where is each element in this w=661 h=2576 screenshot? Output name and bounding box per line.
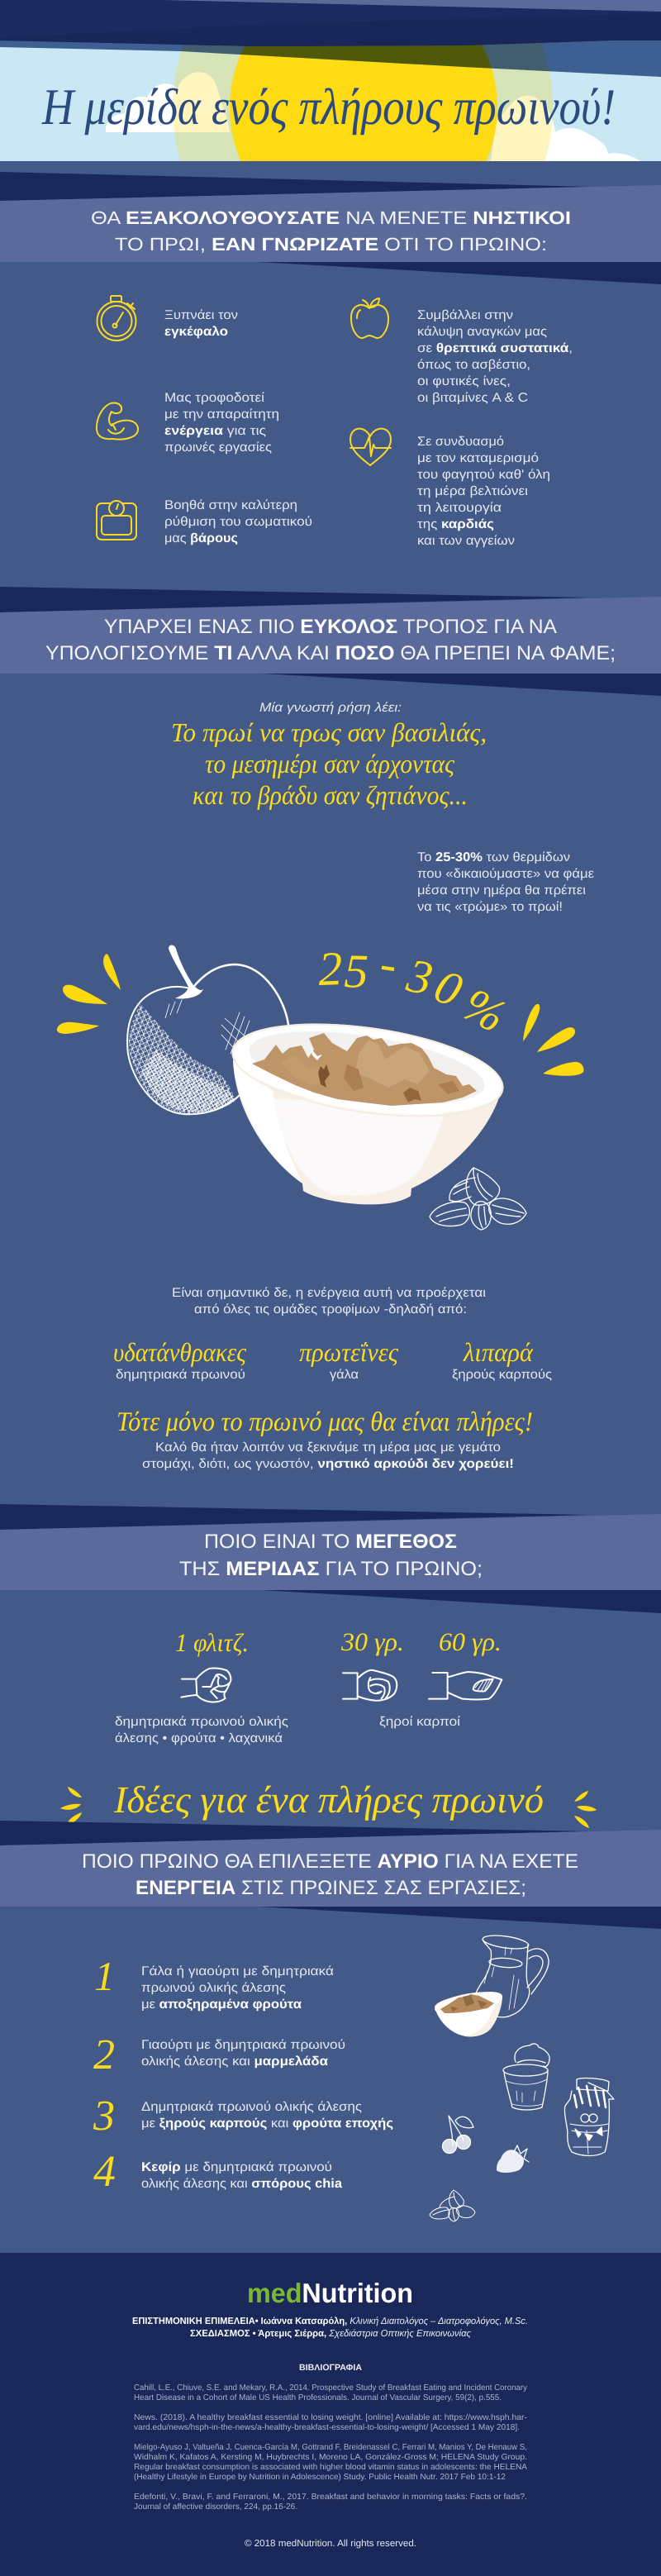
panel: portion size heading: ΤΗΣ ΜΕΡΙΔΑΣ ΓΙΑ ΤΟ ΠΡΩΙΝΟ;	[179, 1558, 483, 1580]
heading: breakfast ideas: Ιδέες για ένα πλήρες πρωινό	[113, 1778, 544, 1821]
sparks: right of bowl	[523, 1004, 584, 1076]
icon: weight scale	[97, 501, 136, 540]
text: closing remark	[142, 1440, 514, 1471]
credits: ΕΠΙΣΤΗΜΟΝΙΚΗ ΕΠΙΜΕΛΕΙΑ• Ιωάννα Κατσαρόλη, Κλινική Διαιτολόγος – Διατροφολόγος, M.Sc.	[132, 2316, 528, 2326]
quote: Το πρωί να τρως σαν βασιλιάς,	[171, 717, 487, 747]
text: calories share: Το 25-30% των θερμίδων	[417, 850, 570, 864]
icon: stopwatch	[97, 296, 136, 340]
bibliography: vard.edu/news/hsph-in-the-news/a-healthy-breakfast-essential-to-losing-weight/ [Accessed 1 May 2018].	[134, 2423, 520, 2432]
icon: fist	[181, 1668, 231, 1702]
sparks: left of apple	[57, 954, 121, 1034]
illustration: small cereal bowl	[435, 1992, 502, 2036]
panel: portion size heading	[0, 1504, 661, 1613]
food group: proteins	[299, 1337, 399, 1382]
text: heart: Σε συνδυασμό	[417, 435, 504, 449]
callout: complete breakfast: Τότε μόνο το πρωινό μας θα είναι πλήρες!	[117, 1407, 533, 1437]
bibliography: News. (2018). A healthy breakfast essential to losing weight. [online] Available at: https://www.hsph.har-	[134, 2413, 527, 2422]
text: heart: και των αγγείων	[417, 534, 515, 548]
idea 3: με ξηρούς καρπούς και φρούτα εποχής	[141, 2117, 393, 2131]
top dark band lower tone	[0, 13, 661, 46]
sparks: right	[574, 1791, 597, 1828]
heading text: ΠΟΙΟ ΕΙΝΑΙ ΤΟ ΜΕΓΕΘΟΣ	[204, 1531, 457, 1553]
idea 1: Γάλα ή γιαούρτι με δημητριακά	[141, 1964, 334, 1978]
percentage: 25-30%	[317, 936, 515, 1043]
bibliography heading: ΒΙΒΛΙΟΓΡΑΦΙΑ	[299, 2363, 362, 2373]
idea 2: Γιαούρτι με δημητριακά πρωινού	[141, 2038, 345, 2052]
illustration: almonds	[430, 1168, 526, 1230]
band	[0, 185, 661, 262]
panel: header banner	[0, 0, 661, 161]
text: nutrients: όπως το ασβέστιο,	[417, 358, 530, 372]
panel: benefits	[97, 296, 573, 548]
icon: muscle arm	[97, 402, 138, 440]
text: energy: πρωινές εργασίες	[164, 440, 272, 455]
lid	[515, 2044, 549, 2067]
idea 3: Δημητριακά πρωινού ολικής άλεσης	[141, 2100, 362, 2114]
text: calories share: μέσα στην ημέρα θα πρέπει	[417, 883, 586, 898]
text: food groups intro: από όλες τις ομάδες τροφίμων -δηλαδή από:	[194, 1302, 467, 1317]
food group: proteins: γάλα	[330, 1368, 359, 1382]
text: weight: ρύθμιση του σωματικού	[164, 515, 312, 529]
food group: proteins: πρωτεΐνες	[299, 1337, 399, 1367]
band	[0, 597, 661, 674]
food group: fats: ξηρούς καρπούς	[452, 1368, 552, 1382]
text: calories share: να τις «τρώμε» το πρωί!	[417, 900, 563, 914]
text: weight: Βοηθά στην καλύτερη	[164, 498, 297, 512]
sun halo	[173, 43, 553, 161]
copyright: © 2018 medNutrition. All rights reserved.	[245, 2539, 416, 2549]
icon: heart with pulse	[350, 429, 391, 465]
idea 3	[93, 2093, 393, 2140]
illustration: apple sketch	[127, 945, 288, 1114]
heading text: ΠΟΙΟ ΠΡΩΙΝΟ ΘΑ ΕΠΙΛΕΞΕΤΕ ΑΥΡΙΟ ΓΙΑ ΝΑ ΕΧΕΤΕ	[82, 1850, 578, 1873]
text: energy	[164, 391, 279, 455]
bibliography: Heart Disease in a Cohort of Male US Health Professionals. Journal of Vascular Surgery, 59(2), p.555.	[134, 2393, 502, 2402]
bibliography: Mielgo-Ayuso J, Valtueña J, Cuenca-García M, Gottrand F, Breidenassel C, Ferrari M, Manios Y, De Henauw S,	[134, 2443, 527, 2452]
idea 4: 4	[93, 2146, 116, 2196]
idea 2	[93, 2031, 345, 2078]
panel: ideas heading	[0, 1821, 661, 1929]
dark wedge above	[0, 1821, 661, 1845]
bibliography: Widhalm K, Kafatos A, Kersting M, Huybrechts I, Moreno LA, González-Gross M; HELENA Study Group.	[134, 2453, 527, 2462]
illustration: jam jar	[564, 2078, 614, 2155]
bibliography: Journal of affective disorders, 224, pp.16-26.	[134, 2502, 297, 2512]
portion: one cup: δημητριακά πρωινού ολικής	[115, 1715, 288, 1729]
bibliography: (Healthy Lifestyle in Europe by Nutrition in Adolescence) Study. Public Health Nutr. 2017 Feb 10:1-12	[134, 2473, 506, 2482]
heading text: ΘΑ ΕΞΑΚΟΛΟΥΘΟΥΣΑΤΕ ΝΑ ΜΕΝΕΤΕ ΝΗΣΤΙΚΟΙ	[91, 207, 571, 228]
illustration: yogurt cup	[503, 2044, 549, 2110]
food group: fats: λιπαρά	[463, 1337, 534, 1367]
quote intro: Μία γνωστή ρήση λέει:	[259, 701, 402, 715]
idea 2: ολικής άλεσης και μαρμελάδα	[141, 2055, 328, 2069]
cereal flakes	[252, 1033, 477, 1106]
illustration: cereal bowl	[227, 1009, 508, 1204]
icon: apple	[351, 298, 388, 338]
idea 4	[93, 2146, 342, 2196]
text: heart: της καρδιάς	[417, 517, 494, 531]
panel: easier way heading: ΥΠΟΛΟΓΙΣΟΥΜΕ ΤΙ ΑΛΛΑ ΚΑΙ ΠΟΣΟ ΘΑ ΠΡΕΠΕΙ ΝΑ ΦΑΜΕ;	[45, 642, 616, 664]
idea 1: με αποξηραμένα φρούτα	[141, 1997, 302, 2012]
band	[0, 1514, 661, 1590]
text: closing remark: Καλό θα ήταν λοιπόν να ξεκινάμε τη μέρα μας με γεμάτο	[155, 1440, 501, 1455]
text: heart: τη λειτουργία	[417, 501, 502, 515]
text: nutrients: Συμβάλλει στην	[417, 308, 513, 322]
portion: one cup: 1 φλιτζ.	[175, 1628, 249, 1657]
credits	[132, 2316, 528, 2339]
band	[0, 1830, 661, 1907]
dark wedge below	[257, 262, 661, 284]
idea 4: ολικής άλεσης και σπόρους chia	[141, 2177, 342, 2191]
idea 1	[94, 1953, 334, 2012]
bibliography: Edefonti, V., Bravi, F. and Ferraroni, M., 2017. Breakfast and behavior in morning tasks: Facts or fads?.	[134, 2493, 527, 2502]
portion: one cup: άλεσης • φρούτα • λαχανικά	[115, 1731, 283, 1745]
portion: nuts	[340, 1627, 502, 1729]
illustration: strawberry	[497, 2145, 529, 2173]
portion: nuts: ξηροί καρποί	[379, 1715, 461, 1729]
logo: medNutrition	[247, 2278, 413, 2308]
idea 2: 2	[93, 2031, 115, 2078]
panel: why breakfast heading	[0, 172, 661, 284]
illustration: jug	[474, 1933, 549, 2017]
text: heart: με τον καταμερισμό	[417, 451, 539, 465]
text: nutrients: οι φυτικές ίνες,	[417, 374, 511, 388]
panel: why breakfast heading: ΤΟ ΠΡΩΙ, ΕΑΝ ΓΝΩΡΙΖΑΤΕ ΟΤΙ ΤΟ ΠΡΩΙΝΟ:	[115, 234, 547, 255]
text: heart	[417, 435, 550, 548]
dark wedge above	[0, 172, 590, 201]
text: brain	[164, 308, 238, 339]
text: weight: μας βάρους	[164, 531, 238, 545]
dark wedge below	[261, 674, 661, 696]
panel: footer	[0, 2253, 661, 2576]
food group: carbohydrates: υδατάνθρακες	[113, 1337, 247, 1367]
food group: carbohydrates	[113, 1337, 247, 1382]
portion: one cup	[115, 1628, 288, 1745]
text: nutrients	[417, 308, 573, 405]
quote	[171, 717, 487, 810]
panel: ideas heading: ΕΝΕΡΓΕΙΑ ΣΤΙΣ ΠΡΩΙΝΕΣ ΣΑΣ ΕΡΓΑΣΙΕΣ;	[136, 1877, 526, 1899]
text: energy: Μας τροφοδοτεί	[164, 391, 265, 405]
heading: breakfast ideas	[60, 1778, 597, 1828]
text: nutrients: οι βιταμίνες A & C	[417, 391, 528, 405]
dark wedge below	[257, 1907, 661, 1929]
food group: fats	[452, 1337, 552, 1382]
text: heart: του φαγητού καθ' όλη	[417, 468, 550, 482]
illustration: cherries	[443, 2116, 473, 2154]
text: energy: με την απαραίτητη	[164, 407, 279, 421]
clouds	[106, 72, 640, 161]
sun	[230, 45, 497, 161]
shadow band over sky	[0, 37, 661, 77]
icon: closed hand	[343, 1670, 397, 1701]
text: calories share: που «δικαιούμαστε» να φάμε	[417, 867, 594, 881]
idea 1: πρωινού ολικής άλεσης	[141, 1981, 286, 1995]
dark wedge below	[261, 1590, 661, 1613]
panel: easier way heading	[0, 587, 661, 696]
text: brain: εγκέφαλο	[164, 325, 228, 339]
text: food groups intro: Είναι σημαντικό δε, η ενέργεια αυτή να προέρχεται	[172, 1286, 486, 1300]
text: weight	[164, 498, 312, 545]
bibliography: Regular breakfast consumption is associated with higher blood vitamin status in adolescents: the HELENA	[134, 2463, 527, 2472]
bibliography: Cahill, L.E., Chiuve, S.E. and Mekary, R.A., 2014. Prospective Study of Breakfast Eating and Incident Coronary	[134, 2383, 527, 2393]
dark wedge above	[0, 587, 590, 612]
dark wedge above	[0, 1504, 590, 1530]
quote: και το βράδυ σαν ζητιάνος...	[193, 780, 468, 810]
sky	[0, 40, 661, 161]
text: calories share	[417, 850, 594, 914]
text: heart: τη μέρα βελτιώνει	[417, 484, 528, 498]
bibliography	[134, 2383, 527, 2512]
text: food groups intro	[172, 1286, 486, 1317]
illustration: almonds small	[430, 2190, 475, 2221]
text: nutrients: κάλυψη αναγκών μας	[417, 325, 547, 339]
quote: το μεσημέρι σαν άρχοντας	[205, 749, 455, 779]
text: energy: ενέργεια για τις	[164, 424, 266, 438]
idea 4: Κεφίρ με δημητριακά πρωινού	[141, 2160, 332, 2174]
text: closing remark: στομάχι, διότι, ως γνωστόν, νηστικό αρκούδι δεν χορεύει!	[142, 1457, 514, 1471]
heading text: ΥΠΑΡΧΕΙ ΕΝΑΣ ΠΙΟ ΕΥΚΟΛΟΣ ΤΡΟΠΟΣ ΓΙΑ ΝΑ	[104, 616, 557, 638]
portion: nuts: 60 γρ.	[439, 1627, 502, 1656]
sparks: left	[60, 1787, 82, 1825]
portion: nuts: 30 γρ.	[340, 1627, 404, 1656]
idea 3: 3	[93, 2093, 115, 2140]
top light wedge	[160, 0, 661, 12]
food group: carbohydrates: δημητριακά πρωινού	[116, 1368, 245, 1382]
text: nutrients: σε θρεπτικά συστατικά ,	[417, 341, 573, 355]
text: brain: Ξυπνάει τον	[164, 308, 238, 322]
credits: ΣΧΕΔΙΑΣΜΟΣ • Άρτεμις Σιέρρα, Σχεδιάστρια Οπτικής Επικοινωνίας	[190, 2329, 471, 2339]
top dark band	[0, 0, 661, 46]
idea 1: 1	[94, 1953, 115, 1999]
icon: open hand	[429, 1672, 502, 1699]
